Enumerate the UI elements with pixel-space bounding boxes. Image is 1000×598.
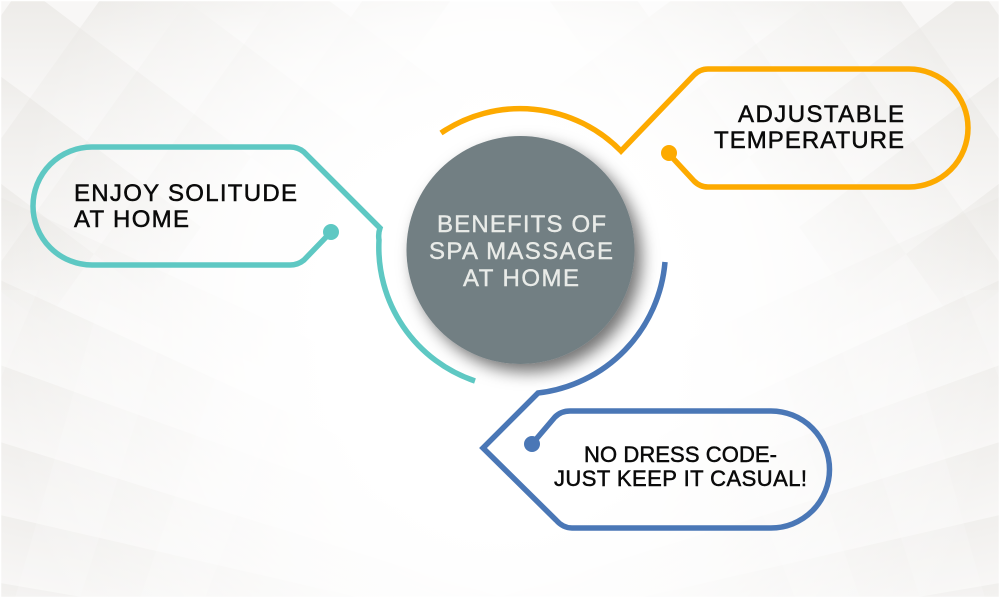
- blue label: JUST KEEP IT CASUAL!: [554, 466, 807, 491]
- central circle: benefits of spa massage at home: [406, 136, 634, 364]
- teal outline: [33, 147, 475, 381]
- teal label: AT HOME: [74, 206, 189, 233]
- blue callout: no dress code: [483, 262, 830, 528]
- central title: AT HOME: [463, 265, 579, 292]
- orange label: TEMPERATURE: [714, 127, 904, 154]
- grey circle with shadow: [406, 136, 634, 364]
- blue label: NO DRESS CODE-: [584, 442, 777, 467]
- central title: SPA MASSAGE: [429, 238, 613, 265]
- teal callout: enjoy solitude at home: [33, 147, 475, 381]
- orange callout: adjustable temperature: [441, 69, 968, 187]
- central title: BENEFITS OF: [437, 211, 606, 238]
- teal dot: [323, 224, 339, 240]
- teal label: ENJOY SOLITUDE: [74, 180, 297, 207]
- orange dot: [661, 145, 677, 161]
- orange label: ADJUSTABLE: [738, 101, 904, 128]
- blue dot: [524, 436, 540, 452]
- orange outline: [441, 69, 968, 187]
- blue outline: [483, 262, 830, 528]
